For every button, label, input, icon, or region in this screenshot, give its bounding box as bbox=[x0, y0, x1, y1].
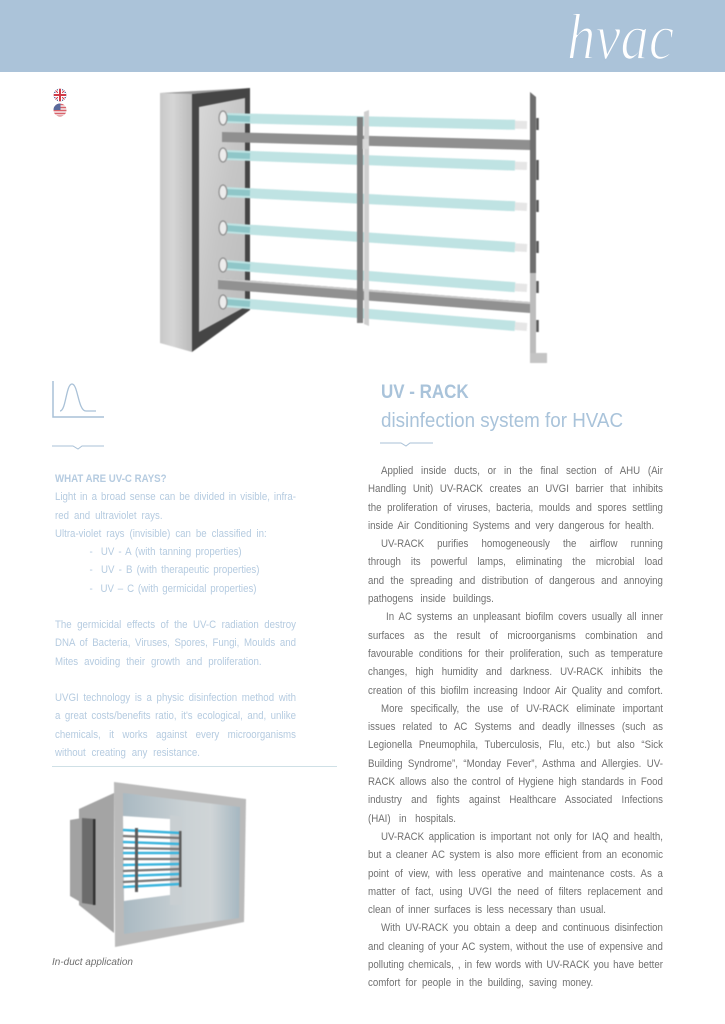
text block: what are UV-C rays: red and ultraviolet rays. bbox=[54, 510, 162, 522]
body text: matter of fact, using UVGI the need of filters replacement and bbox=[368, 886, 663, 898]
duct body bbox=[70, 782, 246, 947]
text block: what are UV-C rays: - UV - A (with tanning properties) bbox=[89, 546, 241, 558]
text block: what are UV-C rays: - UV – C (with germicidal properties) bbox=[89, 583, 256, 595]
body text bbox=[368, 465, 663, 989]
text block: UVGI technology: a great costs/benefits ratio, it's ecological, and, unlike bbox=[54, 710, 295, 722]
body text: In AC systems an unpleasant biofilm covers usually all inner bbox=[386, 611, 663, 623]
body text: More specifically, the use of UV-RACK eliminate important bbox=[381, 703, 663, 715]
subheading: what are UV-C rays: WHAT ARE UV-C RAYS? bbox=[54, 473, 166, 485]
subtitle: disinfection system for HVAC bbox=[381, 410, 623, 432]
body text: industry and fights against Healthcare Associated Infections bbox=[368, 794, 663, 806]
body text: UV-RACK application is important not only for IAQ and health, bbox=[381, 831, 663, 843]
support bars bbox=[218, 132, 530, 313]
body text: pathogens inside buildings. bbox=[368, 593, 494, 605]
body text: and the spreading and distribution of dangerous and annoying bbox=[368, 575, 663, 587]
body text: creation of this biofilm increasing Indoor Air Quality and comfort. bbox=[368, 685, 663, 697]
body text: With UV-RACK you obtain a deep and continuous disinfection bbox=[381, 922, 663, 934]
body text: Applied inside ducts, or in the final section of AHU (Air bbox=[381, 465, 663, 477]
text block: UVGI technology: UVGI technology is a physic disinfection method with bbox=[54, 692, 295, 704]
body text: inside Air Conditioning Systems and very dangerous for health. bbox=[368, 520, 654, 532]
left divider bbox=[52, 446, 104, 450]
text block: germicidal effects bbox=[54, 619, 296, 668]
body text: surfaces as the result of microorganisms combination and bbox=[368, 630, 663, 642]
product image: UV-RACK lamp rack bbox=[160, 87, 548, 364]
body text: (HAI) in hospitals. bbox=[368, 813, 456, 825]
body text: the proliferation of viruses, bacteria, moulds and spores settling bbox=[368, 502, 663, 514]
body text: Legionella Pneumophila, Tuberculosis, Flu, etc.) but also “Sick bbox=[368, 739, 663, 751]
text block: germicidal effects: The germicidal effects of the UV-C radiation destroy bbox=[54, 619, 295, 631]
body text: RACK allows also the control of Hygiene high standards in Food bbox=[368, 776, 663, 788]
duct lamps and bars bbox=[123, 828, 182, 892]
text block: germicidal effects: Mites avoiding their growth and proliferation. bbox=[54, 656, 261, 668]
text block: germicidal effects: DNA of Bacteria, Viruses, Spores, Fungi, Moulds and bbox=[54, 637, 295, 649]
icon: US flag bbox=[54, 104, 66, 116]
body text: issues related to AC Systems and deadly illnesses (such as bbox=[368, 721, 663, 733]
body text: comfort for people in the building, saving money. bbox=[368, 977, 593, 989]
body text: and cleaning of your AC system, without the use of expensive and bbox=[368, 941, 663, 953]
text block: UVGI technology bbox=[54, 692, 296, 759]
body text: Handling Unit) UV-RACK creates an UVGI barrier that inhibits bbox=[368, 483, 663, 495]
product image: in-duct application bbox=[70, 782, 246, 948]
body text: point of view, with less operative and maintenance costs. As a bbox=[368, 868, 663, 880]
body text: favourable conditions for their proliferation, such as temperature bbox=[368, 648, 663, 660]
icon: spectrum curve chart bbox=[52, 381, 104, 418]
body text: UV-RACK purifies homogeneously the airflow running bbox=[381, 538, 663, 550]
title: UV - RACK bbox=[381, 381, 469, 403]
body text: but a cleaner AC system is also more efficient from an economic bbox=[368, 849, 663, 861]
body text: Building Syndrome”, “Monday Fever”, Asthma and Allergies. UV- bbox=[368, 758, 663, 770]
text block: what are UV-C rays bbox=[54, 473, 296, 595]
body text: changes, high humidity and darkness. UV-RACK inhibits the bbox=[368, 666, 663, 678]
text block: UVGI technology: without creating any resistance. bbox=[54, 747, 199, 759]
body text: through its powerful lamps, eliminating the microbial load bbox=[368, 556, 663, 568]
header band bbox=[0, 0, 725, 72]
caption: in-duct application: In-duct application bbox=[52, 956, 133, 968]
body text: polluting chemicals, , in few words with UV-RACK you have better bbox=[368, 959, 663, 971]
left housing bbox=[160, 88, 250, 352]
right post bbox=[530, 92, 547, 363]
left column rule bbox=[52, 766, 337, 767]
text block: UVGI technology: chemicals, it works against every microorganisms bbox=[54, 729, 295, 741]
body text: clean of inner surfaces is less necessary than usual. bbox=[368, 904, 606, 916]
text block: what are UV-C rays: Light in a broad sense can be divided in visible, infra- bbox=[54, 491, 295, 503]
lamp sockets bbox=[219, 111, 227, 309]
icon: UK flag bbox=[54, 88, 66, 102]
right divider bbox=[380, 442, 433, 446]
middle post bbox=[357, 110, 369, 326]
text block: what are UV-C rays: Ultra-violet rays (invisible) can be classified in: bbox=[54, 528, 266, 540]
UV lamps bbox=[225, 118, 527, 327]
text block: what are UV-C rays: - UV - B (with therapeutic properties) bbox=[89, 564, 259, 576]
